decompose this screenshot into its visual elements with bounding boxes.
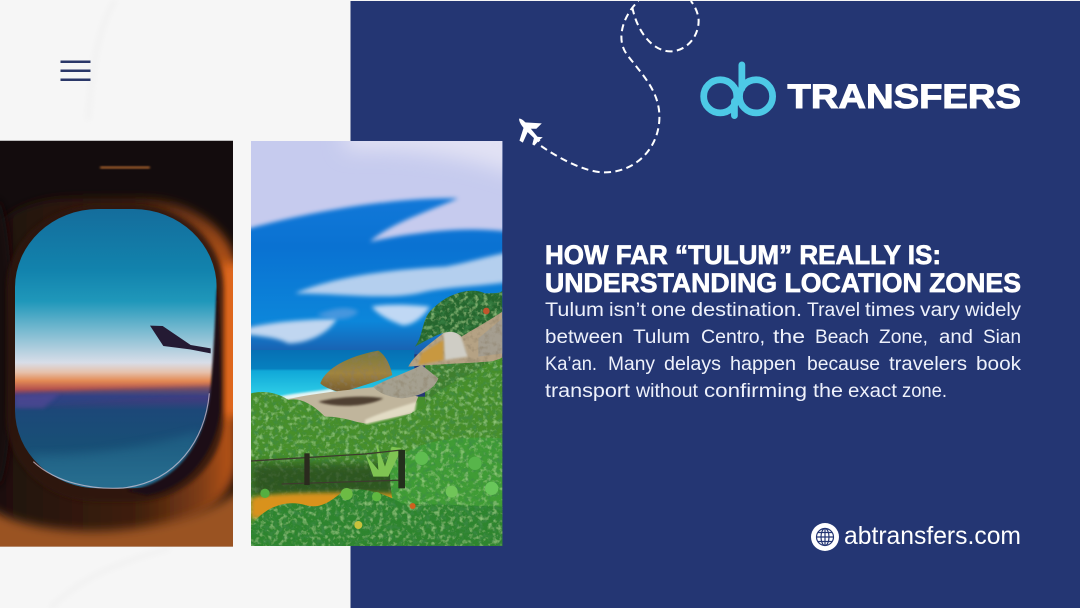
body text: delays — [664, 354, 721, 375]
body text: travelers — [889, 354, 967, 375]
body text: Centro, — [701, 327, 765, 348]
body text: Zone, — [879, 327, 928, 348]
sub-element: vegetation — [251, 357, 502, 546]
icon: globe — [811, 523, 839, 551]
body text: Travel — [807, 300, 860, 321]
icon: airplane — [519, 119, 543, 146]
body text: transport — [545, 381, 631, 402]
heading: HOW FAR “TULUM” REALLY IS: — [545, 240, 941, 270]
body text: widely — [964, 300, 1022, 321]
body text: happen — [730, 354, 796, 375]
body text: Many — [608, 354, 655, 375]
body text: destination. — [691, 300, 802, 321]
body text: Beach — [815, 327, 869, 348]
icon: ab infinity mark — [704, 65, 773, 116]
sub-element: beach — [285, 387, 418, 423]
photo: Tulum beach — [251, 141, 502, 546]
heading — [545, 240, 1021, 298]
body text: Ka’an. — [545, 354, 597, 375]
sub-element: rock — [320, 351, 392, 393]
body text: zone. — [902, 381, 947, 402]
logo wordmark: TRANSFERS — [788, 78, 1021, 116]
photo: airplane window — [0, 141, 247, 560]
logo: ab Transfers — [704, 65, 1021, 116]
body text: isn’t — [609, 300, 647, 321]
body text: times — [865, 300, 915, 321]
icon: hamburger menu — [60, 60, 90, 81]
website link — [811, 522, 1021, 551]
body text — [545, 300, 1022, 402]
body text: vary — [920, 300, 961, 321]
body text: exact — [848, 381, 898, 402]
body text: confirming — [704, 381, 807, 402]
body text: because — [807, 354, 880, 375]
panel: marble background — [0, 0, 351, 608]
body text: book — [976, 354, 1022, 375]
sub-element: cliff — [408, 308, 502, 367]
body text: the — [773, 327, 805, 348]
body text: without — [635, 381, 699, 402]
body text: Tulum — [545, 300, 604, 321]
body text: Tulum — [633, 327, 690, 348]
body text: between — [545, 327, 623, 348]
panel: navy background — [350, 1, 1080, 608]
icon: aircraft wing — [150, 326, 211, 353]
body text: Sian — [983, 327, 1021, 348]
icon: dashed flight path — [541, 1, 699, 172]
body text: and — [939, 327, 973, 348]
body text: the — [813, 381, 843, 402]
heading: UNDERSTANDING LOCATION ZONES — [545, 268, 1021, 298]
body text: one — [651, 300, 686, 321]
website address: abtransfers.com — [844, 522, 1021, 550]
